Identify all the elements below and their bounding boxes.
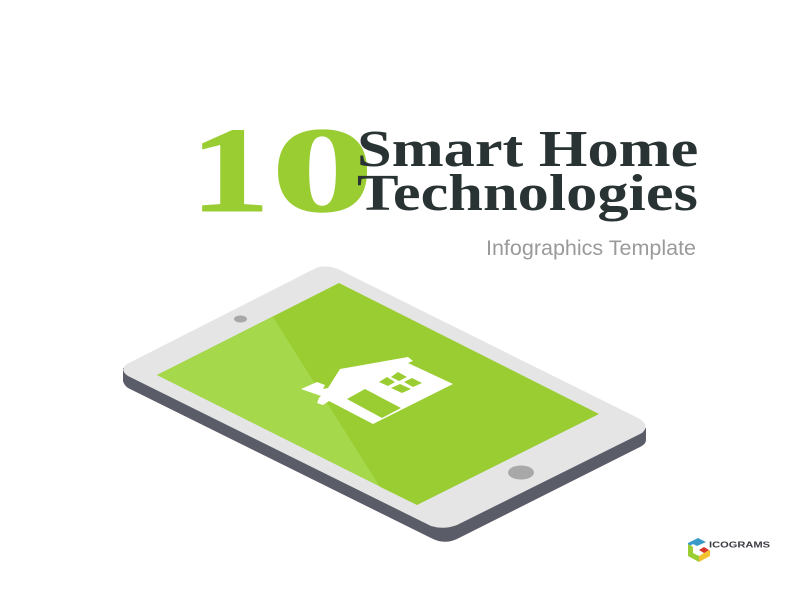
house silhouette bbox=[301, 357, 453, 424]
screen bbox=[157, 283, 599, 505]
logo bbox=[688, 538, 770, 562]
tablet face bbox=[123, 266, 646, 528]
logo blue face bbox=[688, 538, 706, 547]
tablet illustration bbox=[123, 266, 646, 542]
tablet side edge bbox=[123, 368, 646, 542]
logo icon bbox=[688, 538, 710, 562]
title bbox=[357, 121, 698, 222]
screen highlight bbox=[157, 317, 417, 505]
subtitle: Infographics Template bbox=[486, 236, 696, 260]
window pane right bbox=[404, 378, 422, 387]
logo green face bbox=[688, 544, 699, 562]
digit 0: 0 bbox=[271, 102, 374, 238]
logo wordmark: ICOGRAMS bbox=[709, 540, 770, 550]
digit 1: 1 bbox=[190, 102, 270, 238]
window pane bottom bbox=[391, 384, 411, 393]
title line 1: Smart Home bbox=[357, 121, 698, 178]
logo red diamond bbox=[699, 547, 709, 553]
window pane left bbox=[379, 377, 395, 386]
icon: house bbox=[301, 357, 453, 424]
window pane top bbox=[391, 372, 407, 381]
door bbox=[347, 389, 401, 418]
big number 10 bbox=[190, 102, 374, 238]
home button bbox=[508, 466, 534, 480]
camera bbox=[234, 316, 247, 322]
logo yellow face bbox=[699, 550, 710, 562]
title line 2: Technologies bbox=[357, 165, 698, 222]
